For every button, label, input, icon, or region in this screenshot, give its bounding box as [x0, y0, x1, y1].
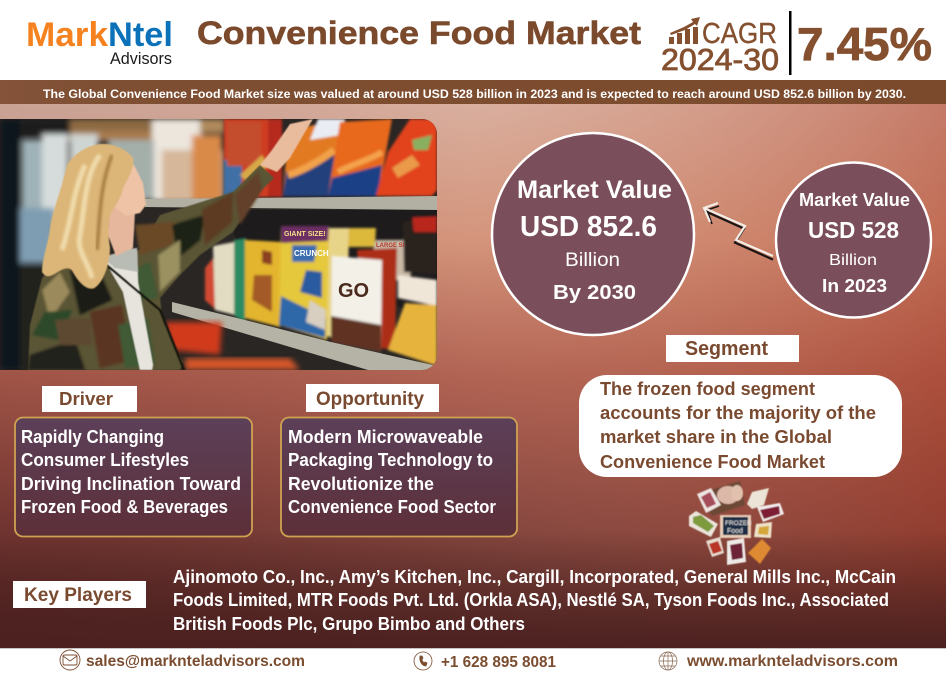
driver heading: Driver [59, 388, 113, 409]
website: www.marknteladvisors.com [686, 653, 898, 670]
panel: driver [15, 418, 252, 536]
circle: market value 2030 [492, 133, 694, 335]
key players heading: Key Players [24, 585, 132, 606]
segment description: accounts for the majority of the [600, 403, 876, 423]
jacket [28, 165, 274, 370]
logo: MarkNtel Advisors: Ntel [108, 16, 173, 54]
key players list: Foods Limited, MTR Foods Pvt. Ltd. (Orkla ASA), Nestlé SA, Tyson Foods Inc., Associated [173, 590, 889, 610]
key players list [173, 567, 896, 634]
neck and face [108, 205, 135, 256]
hand [260, 119, 313, 172]
panel: driver: Consumer Lifestyles [21, 450, 189, 470]
panel: opportunity [281, 418, 517, 536]
logo: MarkNtel Advisors [26, 16, 173, 68]
CAGR value: 7.45% [797, 18, 932, 70]
cereal boxes [205, 216, 437, 366]
panel: opportunity: Modern Microwaveable [288, 427, 483, 447]
panel: driver: Frozen Food & Beverages [21, 497, 228, 517]
icon: globe [659, 652, 677, 670]
opportunity heading: Opportunity [316, 389, 424, 410]
summary strip [0, 80, 946, 104]
icon: phone [414, 652, 432, 670]
logo: MarkNtel Advisors: Mark [26, 16, 109, 54]
icon: email [60, 650, 80, 670]
box text: CRUNCH [294, 249, 329, 258]
woman [28, 119, 313, 370]
circle: market value 2030: Market Value [517, 176, 672, 204]
arrow from 2023 to 2030 [704, 203, 773, 260]
segment heading [666, 335, 799, 362]
upper shelf back wall [234, 210, 437, 308]
upper shelf items [224, 119, 437, 198]
segment description: Convenience Food Market [600, 452, 825, 472]
photo: woman reaching for snacks on a shelf [0, 119, 437, 370]
circle: market value 2030: By 2030 [553, 282, 636, 304]
email address: sales@marknteladvisors.com [86, 653, 305, 670]
box text: LARGE SI [376, 243, 405, 249]
segment description: The frozen food segment [600, 379, 815, 399]
upper shelf [145, 196, 437, 210]
circle: market value 2023: In 2023 [822, 276, 887, 296]
CAGR years: 2024-30 [661, 42, 779, 77]
lower shelf [172, 302, 437, 370]
box text [284, 231, 405, 302]
shirt [103, 248, 153, 370]
icon: growth chart [669, 17, 700, 44]
circle: market value 2023: USD 528 [808, 217, 899, 243]
panel: driver: Driving Inclination Toward [21, 474, 241, 494]
CAGR block [661, 11, 932, 77]
logo: MarkNtel Advisors: Advisors [110, 50, 172, 68]
segment description [579, 375, 902, 477]
phone number: +1 628 895 8081 [441, 654, 556, 671]
icon: frozen food assortment: FROZEN [725, 520, 752, 527]
panel: opportunity: Revolutionize the [288, 474, 434, 494]
circle: market value 2023: Market Value [799, 190, 910, 210]
title: Convenience Food Market [197, 15, 641, 51]
icon: frozen food assortment: Food [727, 528, 743, 535]
circle: market value 2023: Billion [829, 252, 877, 269]
key players list: Ajinomoto Co., Inc., Amy’s Kitchen, Inc., Cargill, Incorporated, General Mills Inc., McCain [173, 567, 896, 587]
circle: market value 2030: USD 852.6 [520, 211, 657, 243]
segment heading: Segment [685, 338, 768, 360]
opportunity heading [306, 384, 439, 412]
key players list: British Foods Plc, Grupo Bimbo and Others [173, 614, 525, 634]
CAGR label: CAGR [702, 18, 777, 50]
panel: opportunity: Packaging Technology to [288, 450, 493, 470]
summary strip: The Global Convenience Food Market size was valued at around USD 528 billion in 2023 and is expected to reach around USD 852.6 billion by 2030. [43, 87, 906, 101]
key players heading [13, 581, 146, 608]
segment description: market share in the Global [600, 427, 832, 447]
panel: opportunity: Convenience Food Sector [288, 497, 496, 517]
circle: market value 2030: Billion [565, 250, 620, 271]
box text: GO [338, 280, 369, 302]
icon: frozen food assortment [689, 481, 784, 565]
hair [42, 144, 133, 288]
box text: GIANT SIZE! [284, 231, 326, 238]
strap [103, 262, 184, 370]
blurred store background [0, 119, 225, 370]
driver heading [42, 386, 137, 412]
footer [0, 648, 946, 674]
circle: market value 2023 [776, 162, 931, 318]
panel: driver: Rapidly Changing [21, 427, 164, 447]
